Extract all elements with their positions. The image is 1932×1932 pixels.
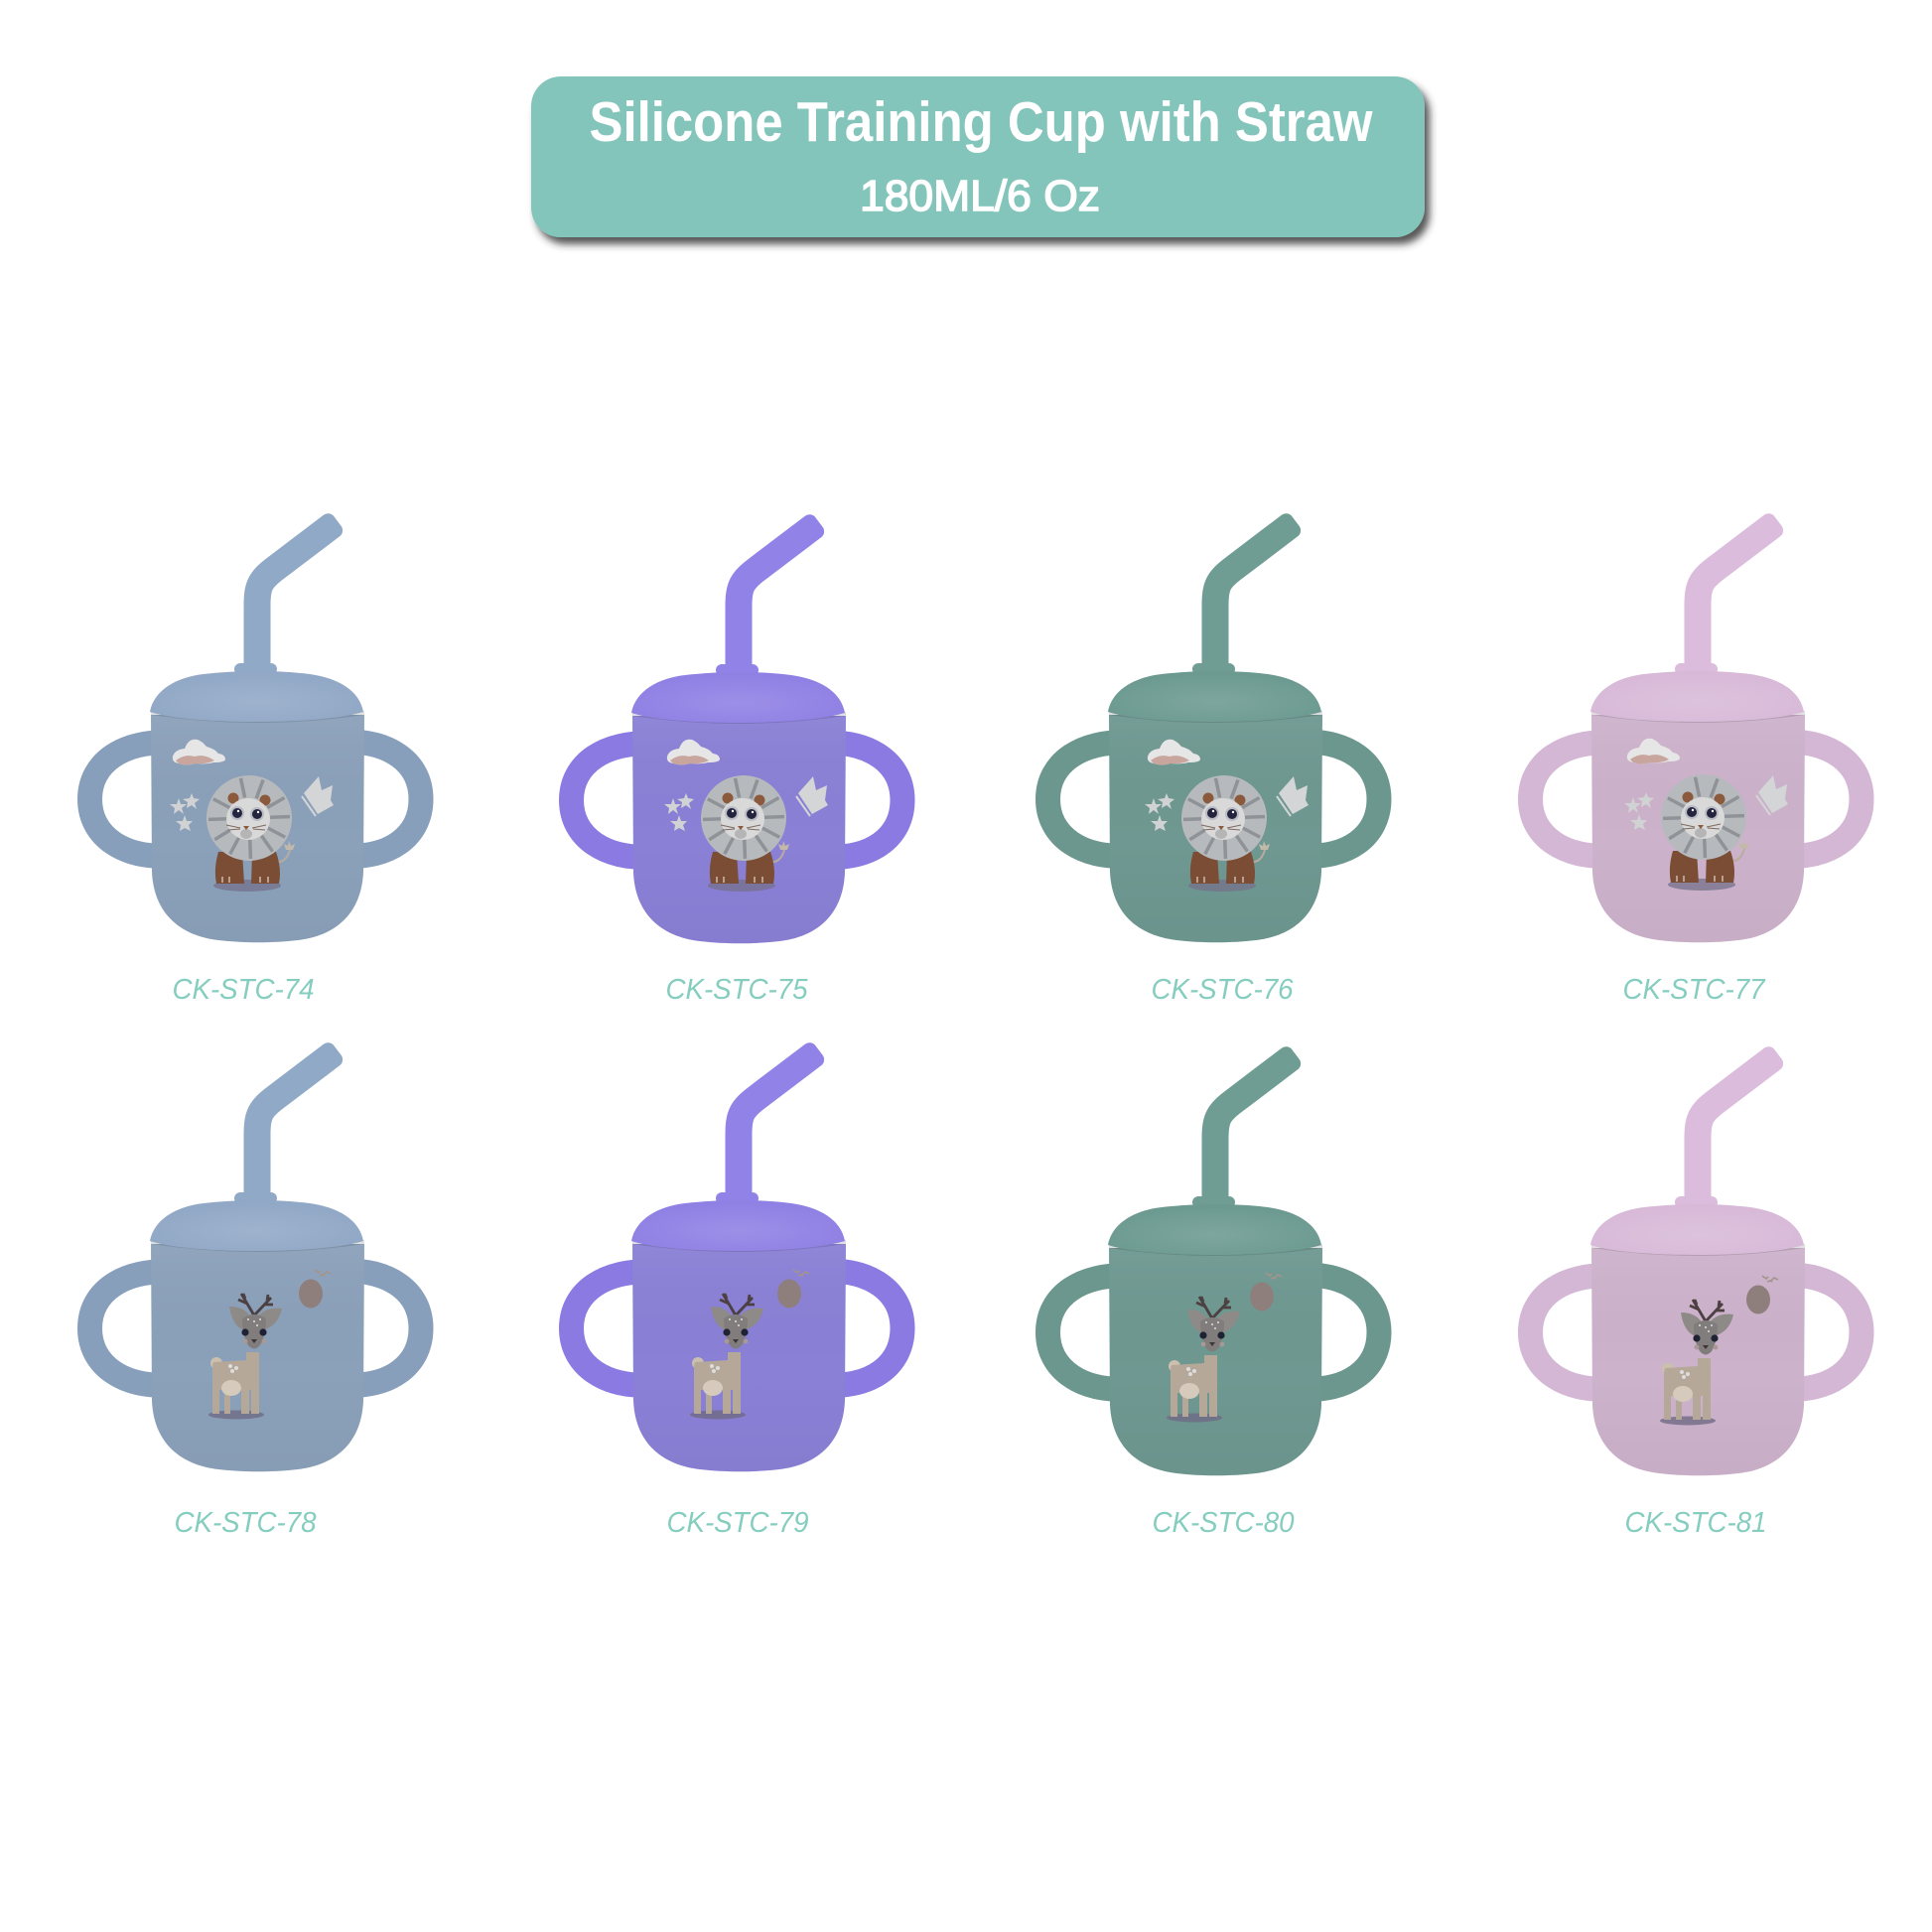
cup: CK-STC-78 blue deer bbox=[89, 1050, 421, 1471]
cup: CK-STC-79 purple deer bbox=[572, 1050, 902, 1471]
icon: lion decal bbox=[1145, 740, 1309, 892]
label: CK-STC-79: CK-STC-79 bbox=[667, 1507, 808, 1539]
label: CK-STC-75: CK-STC-75 bbox=[665, 974, 808, 1006]
cup: CK-STC-77 pink lion bbox=[1531, 521, 1862, 942]
title banner bbox=[531, 76, 1425, 237]
cup: CK-STC-76 green lion bbox=[1048, 521, 1379, 942]
label: CK-STC-81: CK-STC-81 bbox=[1624, 1507, 1767, 1539]
icon: lion decal bbox=[1624, 739, 1788, 891]
cup: CK-STC-80 green deer bbox=[1048, 1054, 1379, 1475]
label: CK-STC-74: CK-STC-74 bbox=[173, 974, 314, 1006]
icon: deer decal bbox=[1167, 1273, 1282, 1422]
label: CK-STC-80: CK-STC-80 bbox=[1152, 1507, 1295, 1539]
icon: deer decal bbox=[1660, 1276, 1778, 1426]
cup: CK-STC-75 purple lion bbox=[572, 522, 902, 943]
label: CK-STC-76: CK-STC-76 bbox=[1152, 974, 1294, 1006]
icon: lion decal bbox=[664, 740, 828, 892]
icon: deer decal bbox=[690, 1270, 809, 1420]
icon: deer decal bbox=[208, 1270, 331, 1420]
banner background bbox=[531, 76, 1425, 237]
label: CK-STC-77: CK-STC-77 bbox=[1622, 974, 1766, 1006]
icon: lion decal bbox=[170, 740, 334, 892]
cup: CK-STC-81 pink deer bbox=[1531, 1054, 1862, 1475]
cup: CK-STC-74 blue lion bbox=[89, 521, 421, 942]
subtitle: capacity: 180ML/6 Oz bbox=[860, 172, 1100, 220]
title: Silicone Training Cup with Straw bbox=[590, 90, 1373, 154]
label: CK-STC-78: CK-STC-78 bbox=[175, 1507, 316, 1539]
